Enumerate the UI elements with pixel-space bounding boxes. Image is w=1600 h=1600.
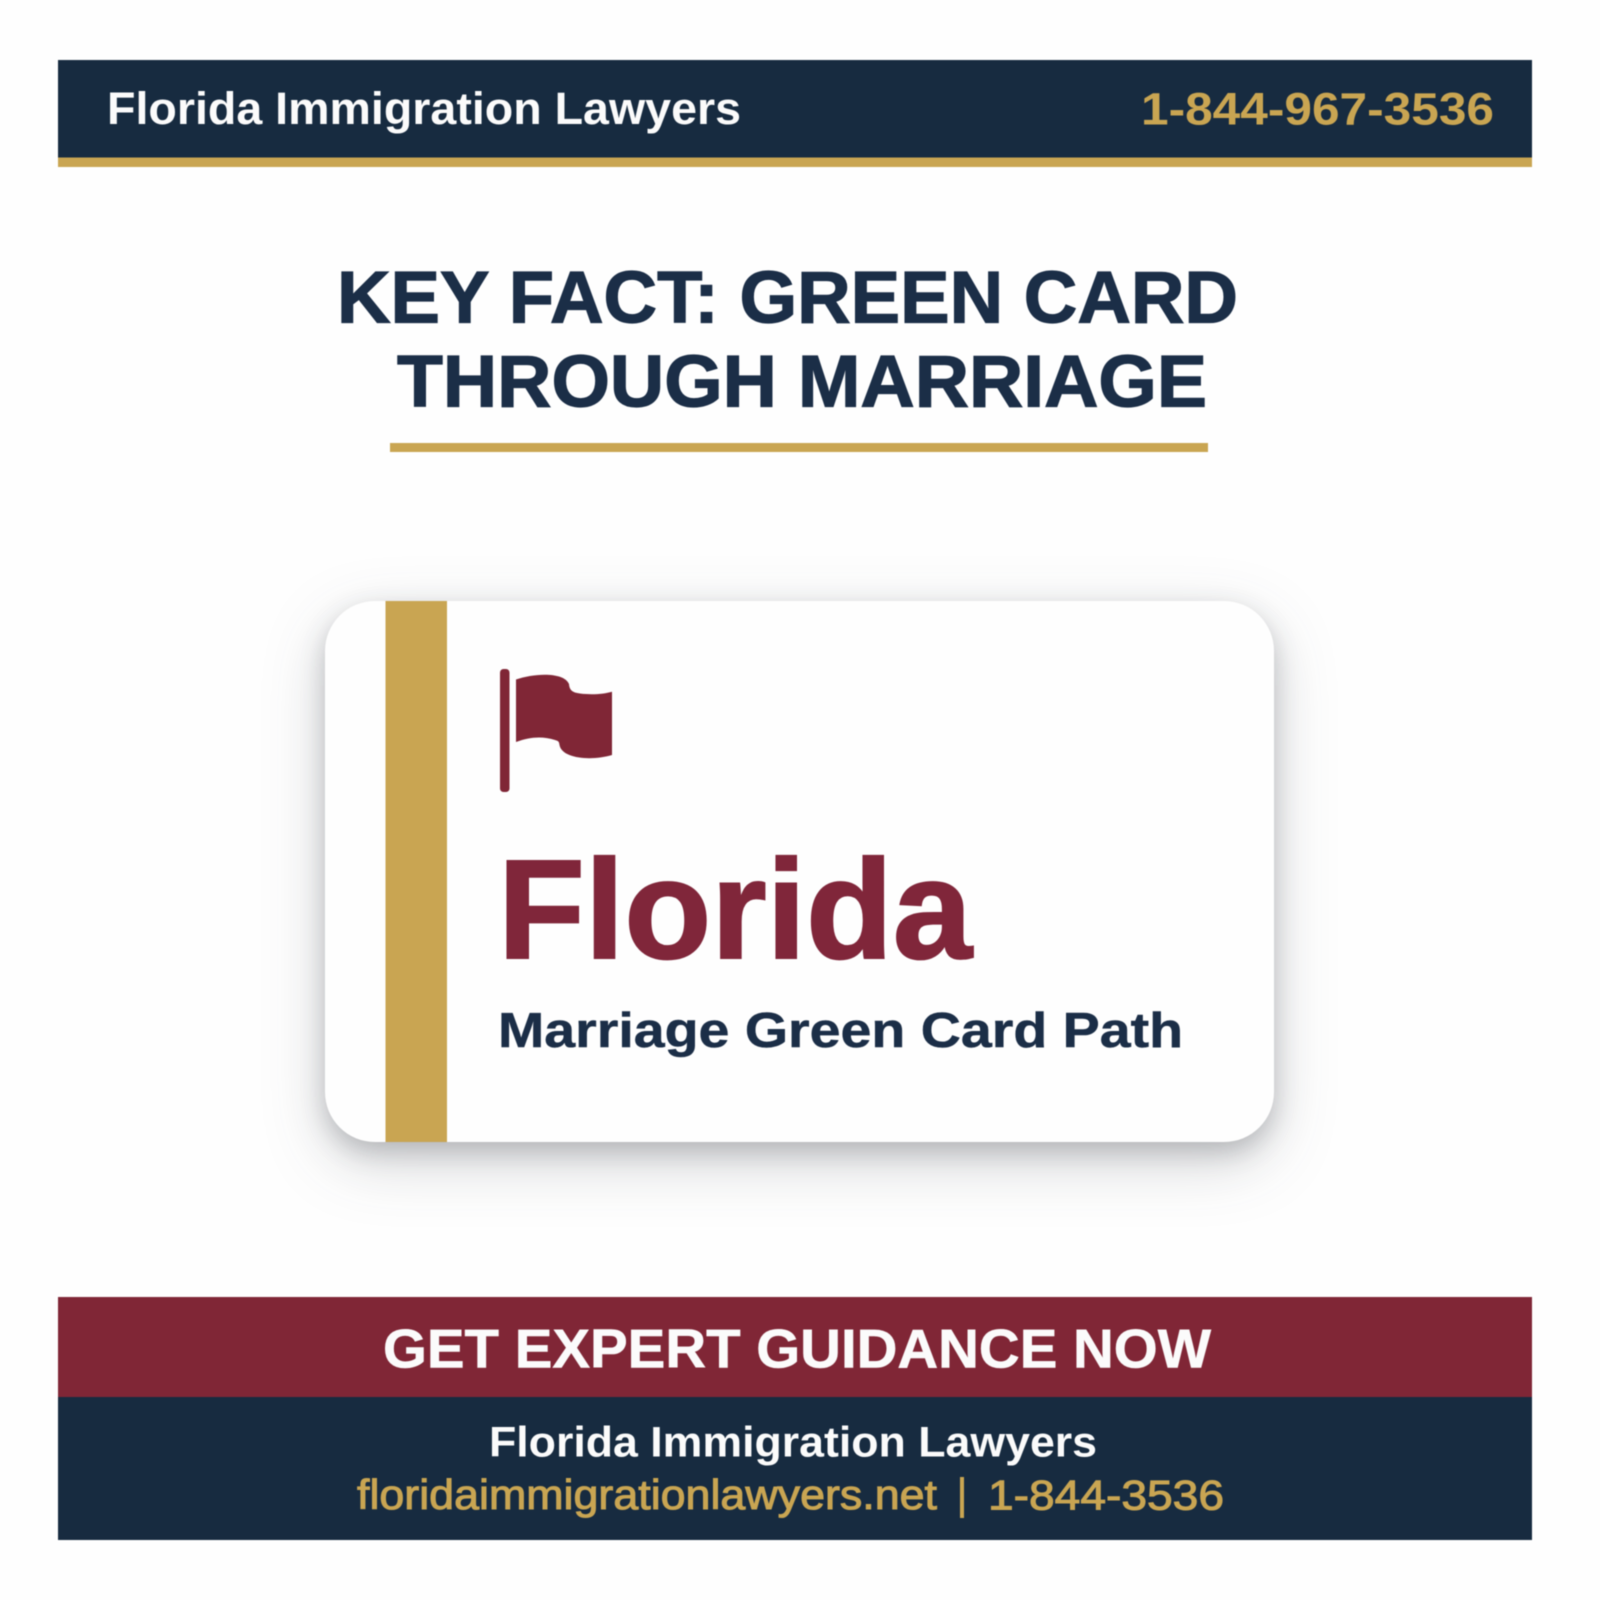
- footer separator: [960, 1477, 964, 1518]
- call-to-action text: GET EXPERT GUIDANCE NOW: [383, 1318, 1211, 1380]
- panel: Florida card: [325, 601, 1274, 1142]
- card subheading: Marriage Green Card Path: [498, 1004, 1183, 1058]
- footer panel: [58, 1397, 1532, 1540]
- footer website: floridaimmigrationlawyers.net: [357, 1471, 937, 1518]
- title: [337, 258, 1238, 422]
- title: THROUGH MARRIAGE: [397, 342, 1207, 422]
- title underline: [390, 443, 1208, 452]
- header firm name: Florida Immigration Lawyers: [107, 83, 741, 134]
- icon: flag: [500, 669, 612, 792]
- footer firm name: Florida Immigration Lawyers: [489, 1418, 1097, 1466]
- gold stripe: [386, 601, 447, 1142]
- footer phone number: 1-844-3536: [988, 1472, 1224, 1518]
- card heading: Florida: [498, 830, 974, 988]
- header bar: [58, 60, 1532, 167]
- header phone number: 1-844-967-3536: [1141, 84, 1494, 134]
- call-to-action banner: [58, 1297, 1532, 1397]
- title: KEY FACT: GREEN CARD: [337, 258, 1238, 338]
